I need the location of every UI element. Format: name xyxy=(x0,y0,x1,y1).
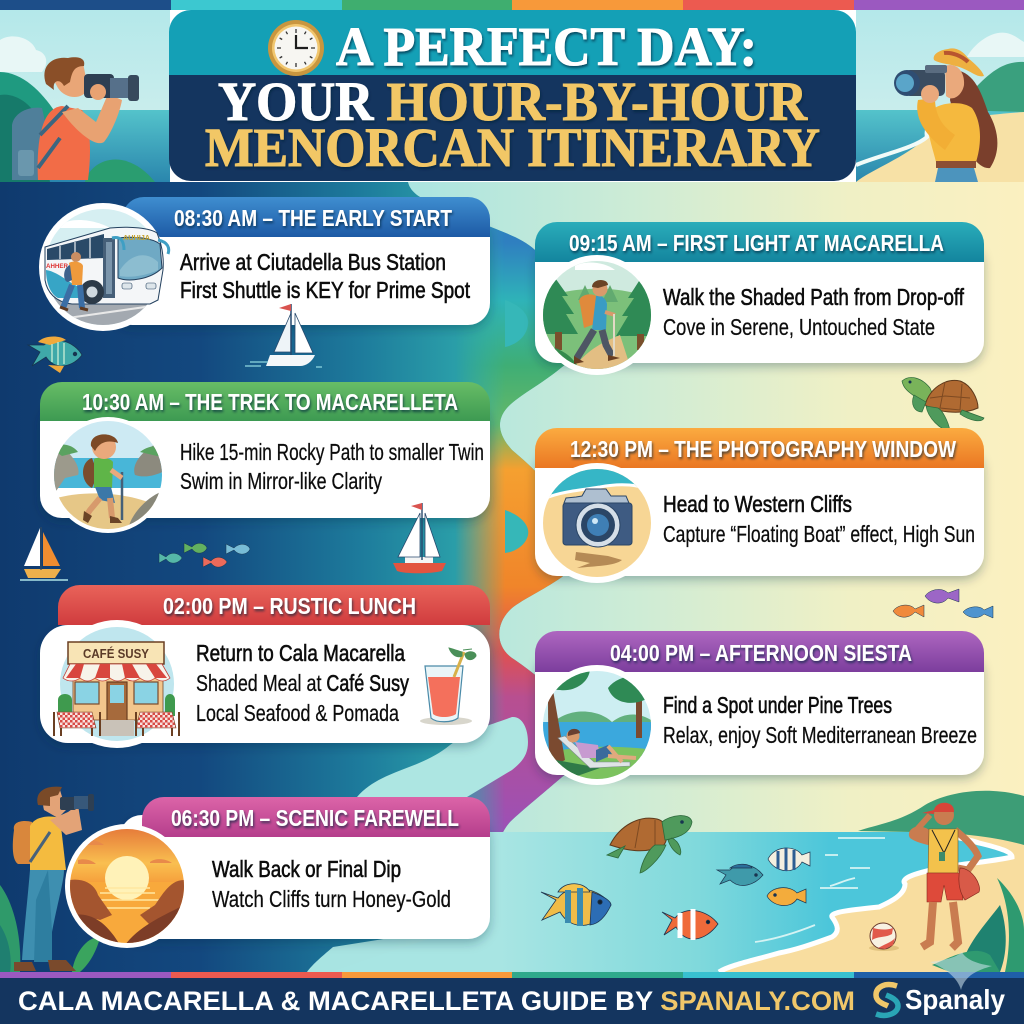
background: colour ribbon timeline xyxy=(457,226,564,832)
card header xyxy=(122,197,490,237)
card text xyxy=(196,640,409,726)
icon: clock xyxy=(268,20,324,76)
icon: pomada drink xyxy=(420,648,476,725)
decorative: orange fish xyxy=(767,888,806,906)
card 7: scenic farewell xyxy=(120,797,490,939)
bus passenger xyxy=(60,252,88,310)
illustration: left foliage xyxy=(0,885,100,972)
decorative: sea turtle upper right xyxy=(902,377,984,431)
illustration: lifeguard xyxy=(909,803,980,948)
card body xyxy=(110,215,490,325)
header time label: 02:00 PM – RUSTIC LUNCH xyxy=(163,593,416,619)
card header xyxy=(535,222,984,262)
decorative: sailboat right xyxy=(393,557,446,573)
header time label: 08:30 AM – THE EARLY START xyxy=(174,205,452,231)
sailboat overlapping card 2 xyxy=(398,503,440,560)
title line 3: MENORCAN ITINERARY xyxy=(205,117,820,178)
card 1: early start xyxy=(39,197,490,331)
bottom beach scene xyxy=(330,791,1024,972)
footer text: CALA MACARELLA & MACARELLETA GUIDE BY SPANALY.COM xyxy=(18,986,855,1016)
card text xyxy=(180,439,484,494)
decorative: sailboat centre top xyxy=(245,355,322,367)
watermark star xyxy=(930,952,992,990)
card header xyxy=(40,382,490,421)
title panel top band xyxy=(169,10,856,76)
background: pale sea gradient xyxy=(0,182,1024,972)
top colour stripe xyxy=(0,0,1024,10)
header time label: 10:30 AM – THE TREK TO MACARELLETA xyxy=(82,389,458,415)
header time label: 04:00 PM – AFTERNOON SIESTA xyxy=(610,640,912,666)
card text: Swim in Mirror-like Clarity xyxy=(180,468,382,494)
illustration: woman photographer xyxy=(894,48,997,182)
card header xyxy=(535,631,984,672)
logo: Spanaly: Spanaly xyxy=(905,984,1005,1015)
card text xyxy=(180,249,470,303)
card text: Cove in Serene, Untouched State xyxy=(663,314,935,340)
card 3: first light xyxy=(530,222,984,375)
card text xyxy=(663,491,975,547)
decorative: teal fish left xyxy=(28,336,82,373)
card text: Head to Western Cliffs xyxy=(663,491,852,517)
illustration: male photographer xyxy=(12,57,139,180)
background: deep water region xyxy=(0,182,588,972)
card text: Watch Cliffs turn Honey-Gold xyxy=(212,886,451,912)
card body xyxy=(535,446,984,576)
title panel bottom band xyxy=(169,75,856,181)
decorative: sailboat left xyxy=(20,527,68,580)
icon: camera on beach xyxy=(537,463,657,583)
header time label: 12:30 PM – THE PHOTOGRAPHY WINDOW xyxy=(570,436,956,462)
card text: Find a Spot under Pine Trees xyxy=(663,692,892,718)
card text: Local Seafood & Pomada xyxy=(196,700,399,726)
card text: Return to Cala Macarella xyxy=(196,640,405,666)
card 2: trek xyxy=(40,382,490,533)
card 4: photography window xyxy=(535,428,984,583)
card text: Hike 15-min Rocky Path to smaller Twin xyxy=(180,439,484,465)
decorative: blue fish xyxy=(717,864,763,885)
icon: shuttle bus: AUHIJA xyxy=(123,235,150,242)
icon: relaxing under trees xyxy=(537,665,657,785)
icon: cafe: CAFÉ SUSY xyxy=(83,646,149,661)
card 6: afternoon siesta xyxy=(535,631,984,785)
icon: cove hiker xyxy=(50,417,166,533)
footer bar xyxy=(0,978,1024,1024)
decorative: fish right trio xyxy=(893,589,993,618)
card header xyxy=(535,428,984,468)
decorative: small fish school xyxy=(159,543,250,567)
card text xyxy=(212,856,451,912)
card 5: rustic lunch xyxy=(40,585,490,748)
header scene: left coast xyxy=(0,10,170,182)
card header xyxy=(58,585,490,625)
illustration: photographer bottom left xyxy=(13,787,94,971)
header time label: 06:30 PM – SCENIC FAREWELL xyxy=(171,805,459,831)
card body xyxy=(40,625,490,743)
sailboat overlapping card 1 xyxy=(274,304,313,355)
decorative: striped fish xyxy=(768,848,810,871)
card text: Shaded Meal at Café Susy xyxy=(196,670,409,696)
decorative: right foliage xyxy=(932,878,1024,972)
bottom colour stripe xyxy=(0,972,1024,978)
card text: Walk Back or Final Dip xyxy=(212,856,401,882)
card body xyxy=(535,650,984,775)
decorative: large rainbow fish xyxy=(541,884,611,926)
card text xyxy=(663,692,977,748)
icon: forest hiker xyxy=(543,255,651,375)
decorative: clownfish xyxy=(662,909,718,940)
ribbon pockets xyxy=(357,300,528,797)
card body xyxy=(535,240,984,363)
card text: Walk the Shaded Path from Drop-off xyxy=(663,284,964,310)
title line 1: A PERFECT DAY: xyxy=(336,16,757,77)
card body xyxy=(120,815,490,939)
card text xyxy=(663,284,964,340)
icon: cafe xyxy=(53,620,181,748)
title panel xyxy=(169,10,856,181)
title line 2: YOUR HOUR-BY-HOUR xyxy=(218,71,808,132)
icon: shuttle bus xyxy=(39,203,169,331)
decorative: beach ball xyxy=(869,923,899,951)
icon: sunset over cliffs xyxy=(65,824,189,948)
decorative: bottom sea turtle xyxy=(607,816,692,873)
header scene: right coast xyxy=(856,10,1024,182)
card text: Arrive at Ciutadella Bus Station xyxy=(180,249,446,275)
card body xyxy=(40,400,490,518)
card text: First Shuttle is KEY for Prime Spot xyxy=(180,277,470,303)
icon: shuttle bus: AHHER xyxy=(46,264,69,270)
header time label: 09:15 AM – FIRST LIGHT AT MACARELLA xyxy=(569,230,944,256)
card header xyxy=(142,797,490,837)
